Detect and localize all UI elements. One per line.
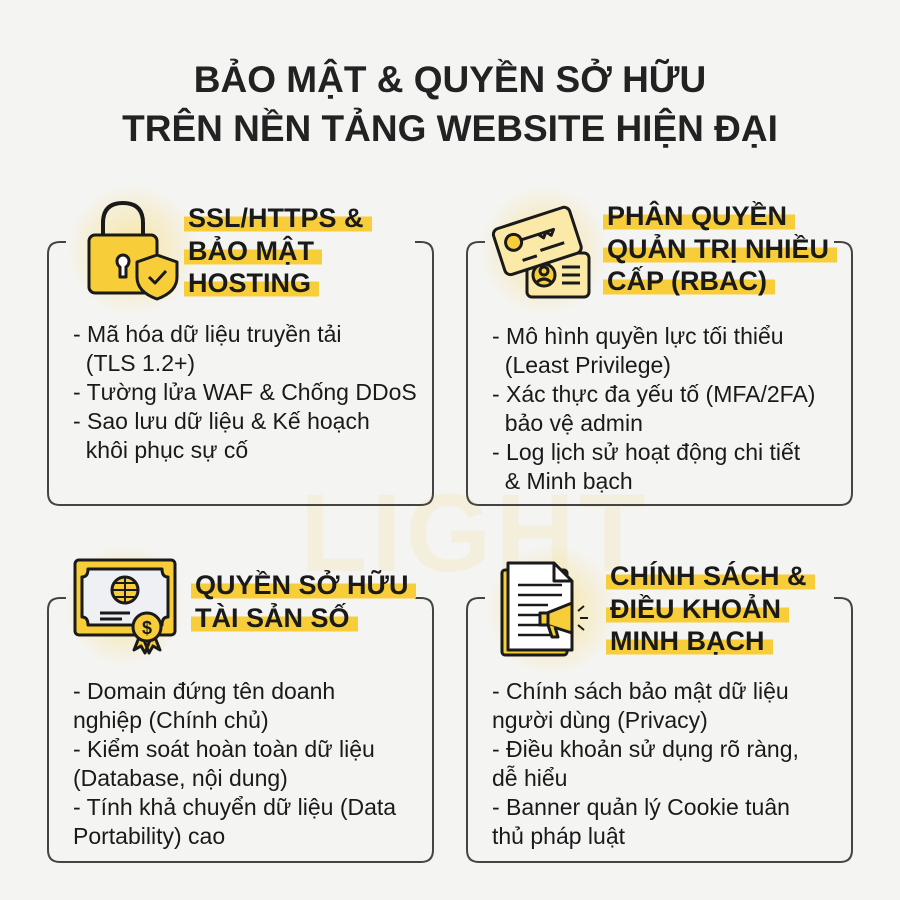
- heading: [191, 570, 416, 632]
- icon: lock with shield: [72, 190, 192, 310]
- bullet list: người dùng (Privacy): [492, 707, 708, 733]
- bullet list: - Tính khả chuyển dữ liệu (Data: [73, 794, 396, 820]
- bullet list: Portability) cao: [73, 823, 225, 849]
- title: [122, 58, 778, 149]
- heading: TÀI SẢN SỐ: [195, 602, 350, 632]
- heading: [606, 561, 815, 656]
- panel: digital asset ownership: [69, 549, 416, 849]
- bullet list: [73, 321, 417, 463]
- heading: QUẢN TRỊ NHIỀU: [607, 234, 829, 264]
- heading: HOSTING: [188, 268, 311, 298]
- heading: ĐIỀU KHOẢN: [610, 594, 781, 624]
- bullet list: - Kiểm soát hoàn toàn dữ liệu: [73, 736, 375, 762]
- title: TRÊN NỀN TẢNG WEBSITE HIỆN ĐẠI: [122, 108, 778, 149]
- bullet list: & Minh bạch: [505, 468, 633, 494]
- heading: [603, 200, 837, 296]
- heading: MINH BẠCH: [610, 626, 764, 656]
- heading: SSL/HTTPS &: [188, 203, 364, 233]
- bullet list: (Least Privilege): [505, 352, 671, 378]
- icon: certificate: [69, 549, 181, 661]
- bullet list: [492, 323, 815, 494]
- bullet list: [73, 678, 396, 849]
- bullet list: bảo vệ admin: [505, 410, 643, 436]
- bullet list: khôi phục sự cố: [86, 437, 248, 463]
- bullet list: - Domain đứng tên doanh: [73, 678, 335, 704]
- panel: policies: [492, 550, 815, 849]
- heading: BẢO MẬT: [188, 236, 314, 266]
- heading: CẤP (RBAC): [607, 266, 767, 296]
- bullet list: - Sao lưu dữ liệu & Kế hoạch: [73, 408, 370, 434]
- title: BẢO MẬT & QUYỀN SỞ HỮU: [194, 59, 706, 100]
- bullet list: thủ pháp luật: [492, 823, 625, 849]
- bullet list: - Tường lửa WAF & Chống DDoS: [73, 379, 417, 405]
- icon: key card and ID card: [485, 191, 604, 310]
- icon: certificate: $: [142, 618, 152, 638]
- heading: QUYỀN SỞ HỮU: [195, 570, 408, 600]
- heading: PHÂN QUYỀN: [607, 201, 787, 231]
- bullet list: - Mã hóa dữ liệu truyền tải: [73, 321, 342, 347]
- panel: SSL/HTTPS: [72, 190, 417, 463]
- bullet list: - Xác thực đa yếu tố (MFA/2FA): [492, 381, 815, 407]
- bullet list: - Banner quản lý Cookie tuân: [492, 794, 790, 820]
- bullet list: - Log lịch sử hoạt động chi tiết: [492, 439, 800, 465]
- bullet list: - Điều khoản sử dụng rõ ràng,: [492, 736, 799, 762]
- bullet list: - Mô hình quyền lực tối thiểu: [492, 323, 784, 349]
- bullet list: nghiệp (Chính chủ): [73, 707, 269, 733]
- heading: [184, 203, 372, 298]
- bullet list: [492, 678, 799, 849]
- watermark: LIGHT: [300, 472, 650, 595]
- heading: CHÍNH SÁCH &: [610, 561, 807, 591]
- bullet list: (TLS 1.2+): [86, 350, 195, 376]
- bullet list: (Database, nội dung): [73, 765, 288, 791]
- icon: document with megaphone: [492, 550, 612, 670]
- bullet list: - Chính sách bảo mật dữ liệu: [492, 678, 789, 704]
- bullet list: dễ hiểu: [492, 765, 567, 791]
- panel: RBAC: [485, 191, 837, 494]
